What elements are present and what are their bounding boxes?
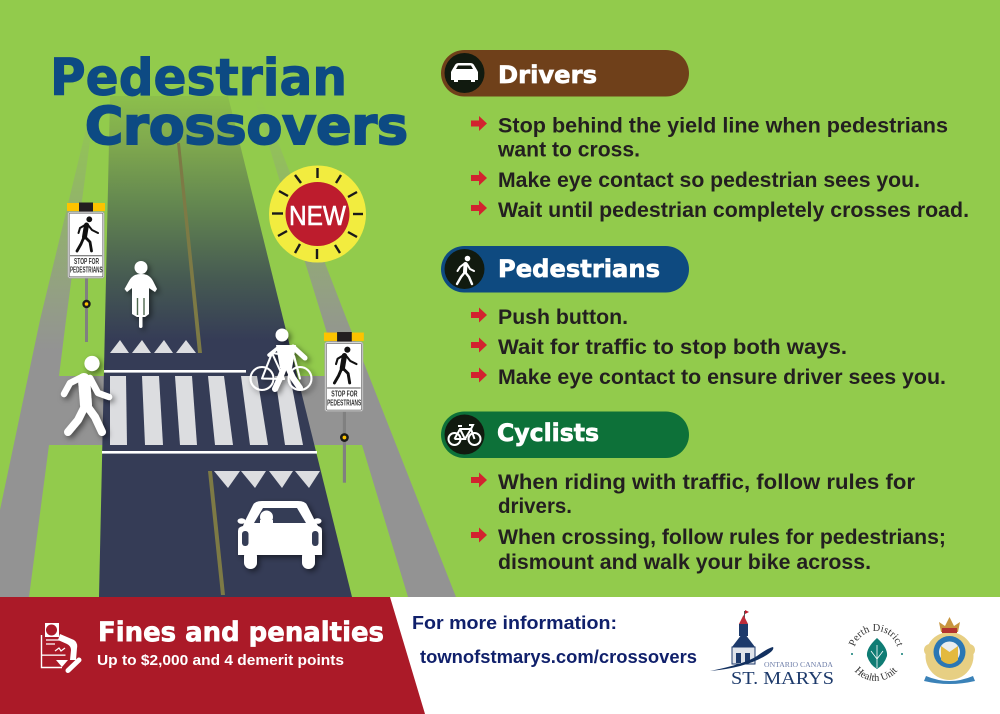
- cyclist riding: [124, 261, 157, 328]
- pedestrian figure: [64, 356, 109, 432]
- title: [50, 49, 408, 157]
- cyclists heading pill: [441, 412, 689, 458]
- right crossover sign: PEDESTRIANS: [327, 398, 361, 408]
- more information: townofstmarys.com/crossovers: [420, 646, 697, 667]
- title line 1: Pedestrian: [50, 49, 347, 108]
- cyclists rules: drivers.: [498, 495, 572, 518]
- sign plate: [68, 212, 104, 278]
- icon: bicycle: [444, 414, 484, 454]
- icon: ticket and hand: [42, 623, 79, 670]
- drivers heading pill: [441, 50, 689, 96]
- stop line lower: [102, 451, 317, 454]
- road illustration: [0, 96, 456, 597]
- panel: fines and penalties: [0, 597, 425, 714]
- left sidewalk: [0, 96, 105, 597]
- cyclist dismounted with bike: [250, 328, 312, 390]
- logo: Perth District Health Unit: Perth District: [848, 624, 902, 647]
- centre line lower: [208, 471, 225, 595]
- panel: pedestrians: Pedestrians: [498, 255, 660, 283]
- footer white strip: [0, 597, 1000, 714]
- crosswalk stripes: [110, 376, 303, 445]
- logo: St. Marys: ONTARIO CANADA: [764, 660, 834, 669]
- logo: St. Marys: [710, 610, 834, 688]
- left crossover sign: STOP FOR: [74, 257, 99, 266]
- centre line upper: [177, 143, 202, 353]
- logo: St. Marys: ST. MARYS: [731, 668, 834, 688]
- stop line upper: [104, 370, 246, 373]
- push button: [82, 300, 91, 308]
- more information: For more information:: [412, 612, 617, 633]
- cyclists rules: When riding with traffic, follow rules for: [498, 471, 915, 494]
- fines heading: Fines and penalties: [98, 617, 384, 648]
- beacon: [324, 333, 364, 341]
- panel: cyclists: [441, 412, 946, 574]
- pedestrians rules: [471, 306, 946, 389]
- panel: drivers: [441, 50, 969, 222]
- car: [238, 501, 322, 569]
- fines detail: Up to $2,000 and 4 demerit points: [97, 653, 344, 669]
- pedestrians rules: Push button.: [498, 306, 628, 329]
- panel: drivers: Drivers: [498, 61, 597, 89]
- yield triangles lower: [214, 471, 320, 488]
- pedestrians heading pill: [441, 246, 689, 292]
- right crossover sign: STOP FOR: [331, 389, 358, 399]
- beacon: [67, 203, 105, 211]
- right crossover sign: [324, 332, 364, 483]
- drivers rules: want to cross.: [497, 139, 640, 162]
- sign plate: [325, 342, 363, 411]
- push button: [340, 433, 349, 442]
- drivers rules: Make eye contact so pedestrian sees you.: [498, 169, 920, 192]
- panel: pedestrians: [441, 246, 946, 389]
- left crossover sign: PEDESTRIANS: [70, 266, 103, 275]
- icon: walking person: [444, 249, 484, 289]
- NEW badge: NEW: [289, 200, 346, 231]
- left crossover sign: [67, 202, 105, 342]
- title line 2: Crossovers: [85, 97, 408, 157]
- right sidewalk: [254, 98, 456, 597]
- logo: Perth District Health Unit: Health Unit: [854, 666, 898, 681]
- more information: [412, 612, 697, 667]
- road surface: [99, 96, 352, 597]
- logo: Perth District Health Unit: [848, 624, 903, 681]
- pole: [85, 272, 88, 342]
- cyclists rules: When crossing, follow rules for pedestrians;: [498, 526, 946, 549]
- cyclists rules: [471, 471, 946, 574]
- drivers rules: Stop behind the yield line when pedestrians: [498, 115, 948, 138]
- icon: car: [444, 53, 484, 93]
- cyclists rules: dismount and walk your bike across.: [498, 551, 871, 574]
- drivers rules: Wait until pedestrian completely crosses road.: [498, 199, 969, 222]
- yield triangles upper: [110, 340, 196, 353]
- pole: [343, 405, 346, 483]
- NEW badge: [269, 166, 366, 262]
- logo: police crest: [924, 617, 975, 684]
- pedestrians rules: Make eye contact to ensure driver sees you.: [498, 366, 946, 389]
- drivers rules: [471, 115, 969, 222]
- panel: cyclists: Cyclists: [497, 419, 599, 447]
- pedestrians rules: Wait for traffic to stop both ways.: [498, 336, 847, 359]
